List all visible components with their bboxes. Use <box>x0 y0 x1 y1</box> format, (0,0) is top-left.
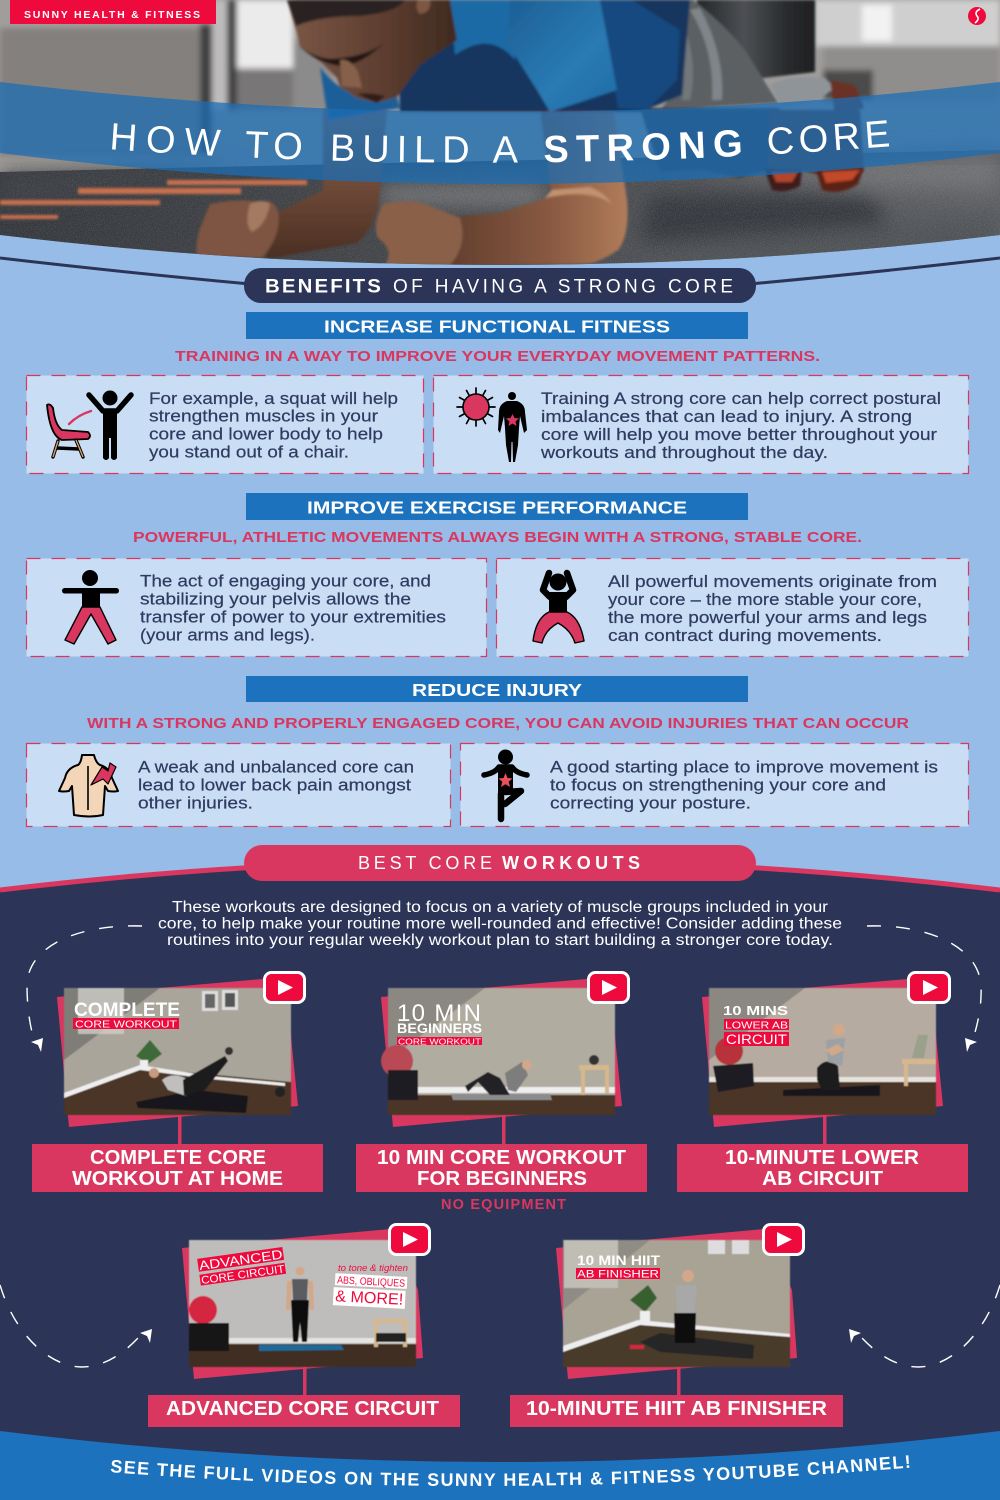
section heading: improve exercise performance <box>246 493 748 520</box>
thumbnail photo <box>563 1240 790 1367</box>
text: squat: For example, a squat will help <box>149 389 398 408</box>
title: TO <box>246 131 301 160</box>
thumbnail title <box>197 1246 408 1309</box>
label: 10 MIN CORE WORKOUT <box>377 1147 626 1169</box>
arrow: dashed top right <box>867 926 981 1052</box>
text: back pain: other injuries. <box>138 794 253 812</box>
text: transfer of power: stabilizing your pelvis allows the <box>140 590 411 608</box>
text: powerful movements: the more powerful your arms and legs <box>608 608 927 627</box>
label <box>356 1144 647 1192</box>
connector <box>303 1367 306 1396</box>
text: posture: A good starting place to improve movement is <box>550 758 938 776</box>
text: transfer of power: The act of engaging your core, and <box>140 572 431 590</box>
text: back pain: lead to lower back pain amongst <box>138 776 411 794</box>
panel: lower back pain <box>26 744 450 826</box>
connector <box>502 1115 506 1145</box>
thumbnail photo <box>189 1240 416 1367</box>
section heading: improve exercise performance: IMPROVE EXERCISE PERFORMANCE <box>307 498 687 518</box>
footer band <box>0 1431 1000 1500</box>
benefits banner connector <box>0 258 1000 284</box>
thumbnail title: 10 MIN HIIT <box>577 1252 660 1268</box>
title: A <box>492 136 518 163</box>
label: 10-MINUTE LOWER <box>725 1147 920 1169</box>
thumbnail photo <box>709 988 936 1115</box>
subheading: avoid injuries: WITH A STRONG AND PROPERLY ENGAGED CORE, YOU CAN AVOID INJURIES THAT CAN OCCUR <box>87 715 909 732</box>
section heading: increase functional fitness: INCREASE FUNCTIONAL FITNESS <box>324 316 670 336</box>
icon: sun and body with core star <box>457 388 527 462</box>
label: COMPLETE CORE <box>90 1147 266 1169</box>
panel: postural imbalances <box>434 376 968 474</box>
text: posture: correcting your posture. <box>550 794 751 812</box>
text: squat: core and lower body to help <box>149 424 383 444</box>
connector <box>677 1367 680 1396</box>
thumbnail photo <box>381 988 615 1115</box>
panel: transfer of power <box>26 558 486 656</box>
panel: powerful movements <box>496 558 968 656</box>
intro text: These workouts are designed to focus on a variety of muscle groups included in your <box>172 899 828 916</box>
heading: best core workouts <box>244 845 756 881</box>
thumbnail title: ADVANCED <box>198 1247 283 1273</box>
video card: advanced core circuit <box>148 1224 460 1427</box>
torso shirt <box>397 0 690 112</box>
hero photo: man holding a plank <box>0 0 1000 265</box>
label: FOR BEGINNERS <box>417 1168 587 1190</box>
icon: YouTube play <box>908 972 950 1002</box>
text: posture: to focus on strengthening your core and <box>550 776 886 794</box>
text: back pain <box>138 758 414 812</box>
subheading: everyday movement: TRAINING IN A WAY TO IMPROVE YOUR EVERYDAY MOVEMENT PATTERNS. <box>175 348 820 365</box>
heading: best core workouts: BEST CORE <box>358 853 492 873</box>
icon: back with pain bolt <box>59 755 118 816</box>
thumbnail title: AB FINISHER <box>577 1268 659 1280</box>
title: STRONG <box>544 130 741 162</box>
arrow: dashed bottom left <box>0 1285 152 1367</box>
title <box>112 120 890 163</box>
heading: benefits of having a strong core <box>244 268 756 303</box>
text: squat <box>149 389 398 462</box>
translucent title band <box>0 82 1000 184</box>
heading: best core workouts: WORKOUTS <box>502 853 640 873</box>
text: transfer of power <box>140 572 446 644</box>
text: powerful movements: your core – the more stable your core, <box>608 590 922 609</box>
brand tag: SUNNY HEALTH & FITNESS <box>24 9 200 21</box>
text: posture: workouts and throughout the day. <box>540 443 828 462</box>
punching bag <box>697 0 815 78</box>
section heading: increase functional fitness <box>246 312 748 339</box>
icon: YouTube play <box>588 972 628 1002</box>
label: WORKOUT AT HOME <box>72 1168 283 1190</box>
text: powerful movements <box>608 572 937 645</box>
thumbnail title: BEGINNERS <box>397 1021 482 1036</box>
thumbnail title: to tone & tighten <box>338 1263 408 1273</box>
arrow: dashed bottom right <box>849 1285 1000 1367</box>
thumbnail title <box>576 1252 660 1280</box>
icon: person standing in T pose <box>62 570 119 644</box>
thumbnail title: & MORE! <box>335 1288 404 1309</box>
thumbnail title: CIRCUIT <box>726 1032 787 1047</box>
text: back pain: A weak and unbalanced core can <box>138 758 414 776</box>
label: AB CIRCUIT <box>762 1168 883 1190</box>
icon: chair and standing person <box>47 390 131 460</box>
label <box>677 1144 968 1192</box>
thumbnail title: LOWER AB <box>725 1020 788 1032</box>
thumbnail title: CORE WORKOUT <box>398 1036 481 1046</box>
icon: YouTube play <box>390 1224 430 1254</box>
arrow: dashed top left <box>27 926 142 1052</box>
video card: complete core workout <box>32 972 323 1192</box>
connector <box>823 1115 826 1145</box>
thumbnail title: ABS, OBLIQUES <box>337 1274 405 1290</box>
title: BUILD <box>332 134 468 162</box>
orange strips <box>167 180 307 185</box>
label <box>32 1144 323 1192</box>
video card: 10 min core workout for beginners <box>356 972 647 1213</box>
note: no equipment: NO EQUIPMENT <box>441 1197 566 1213</box>
label <box>148 1395 460 1427</box>
footer call to action: SEE THE FULL VIDEOS ON THE SUNNY HEALTH & FITNESS YOUTUBE CHANNEL! <box>110 1455 910 1486</box>
panel: improve posture <box>460 744 968 826</box>
icon: YouTube play <box>264 972 304 1002</box>
video card: 10-minute HIIT ab finisher <box>510 1224 843 1427</box>
shorts <box>660 0 778 109</box>
floor <box>0 150 1000 265</box>
legs under band and shoe soles <box>640 108 780 178</box>
shoe and sock <box>771 77 834 102</box>
connector <box>178 1115 182 1145</box>
thumbnail title <box>723 1003 789 1047</box>
thumbnail title: 10 MINS <box>723 1003 788 1018</box>
title: CORE <box>768 120 890 154</box>
section heading: reduce injury <box>246 676 748 702</box>
label <box>510 1395 843 1427</box>
text: squat: strengthen muscles in your <box>149 406 378 426</box>
text: posture: core will help you move better throughout your <box>541 425 937 444</box>
title: HOW <box>112 123 221 156</box>
subheading: athletic movements: POWERFUL, ATHLETIC MOVEMENTS ALWAYS BEGIN WITH A STRONG, STABLE CORE. <box>133 529 862 546</box>
workouts dark section background <box>0 860 1000 1500</box>
text: squat: you stand out of a chair. <box>149 442 349 462</box>
text: powerful movements: All powerful movements originate from <box>608 572 937 591</box>
text: transfer of power: transfer of power to your extremities <box>140 608 446 626</box>
icon: person balancing on one leg <box>484 750 527 819</box>
icon: person in deep squat <box>533 573 584 643</box>
fists <box>196 200 279 258</box>
intro text: routines into your regular weekly workout plan to start building a stronger core today. <box>167 932 833 949</box>
thumbnail title: CORE WORKOUT <box>75 1018 178 1030</box>
text: posture: Training A strong core can help correct postural <box>541 389 941 408</box>
text: posture: imbalances that can lead to injury. A strong <box>541 407 912 426</box>
text: posture <box>540 389 941 462</box>
intro text: core, to help make your routine more well-rounded and effective! Consider adding these <box>158 916 842 932</box>
label: 10-MINUTE HIIT AB FINISHER <box>526 1398 828 1420</box>
text: posture <box>550 758 938 812</box>
thumbnail title <box>397 1000 482 1046</box>
thumbnail title: 10 MIN <box>397 1000 481 1027</box>
heading: benefits of having a strong core: BENEFITS <box>265 276 383 298</box>
thumbnail title: COMPLETE <box>74 1000 180 1021</box>
label: ADVANCED CORE CIRCUIT <box>166 1398 439 1420</box>
left arm <box>262 108 387 259</box>
panel: squat example <box>26 376 424 474</box>
section heading: reduce injury: REDUCE INJURY <box>412 680 582 700</box>
icon: YouTube play <box>764 1224 804 1254</box>
thumbnail title <box>73 1000 180 1030</box>
heading: benefits of having a strong core: OF HAVING A STRONG CORE <box>393 276 733 298</box>
head <box>287 0 457 103</box>
intro text <box>158 899 842 949</box>
thumbnail photo <box>64 988 291 1115</box>
thumbnail title: CORE CIRCUIT <box>200 1263 286 1287</box>
logo badge <box>968 7 986 25</box>
shoulder and sleeves <box>450 0 515 60</box>
right arm <box>440 108 628 266</box>
video card: 10-minute lower ab circuit <box>677 972 968 1192</box>
text: transfer of power: (your arms and legs). <box>140 626 315 644</box>
text: powerful movements: can contract during movements. <box>608 626 882 645</box>
brand tag <box>10 0 216 24</box>
